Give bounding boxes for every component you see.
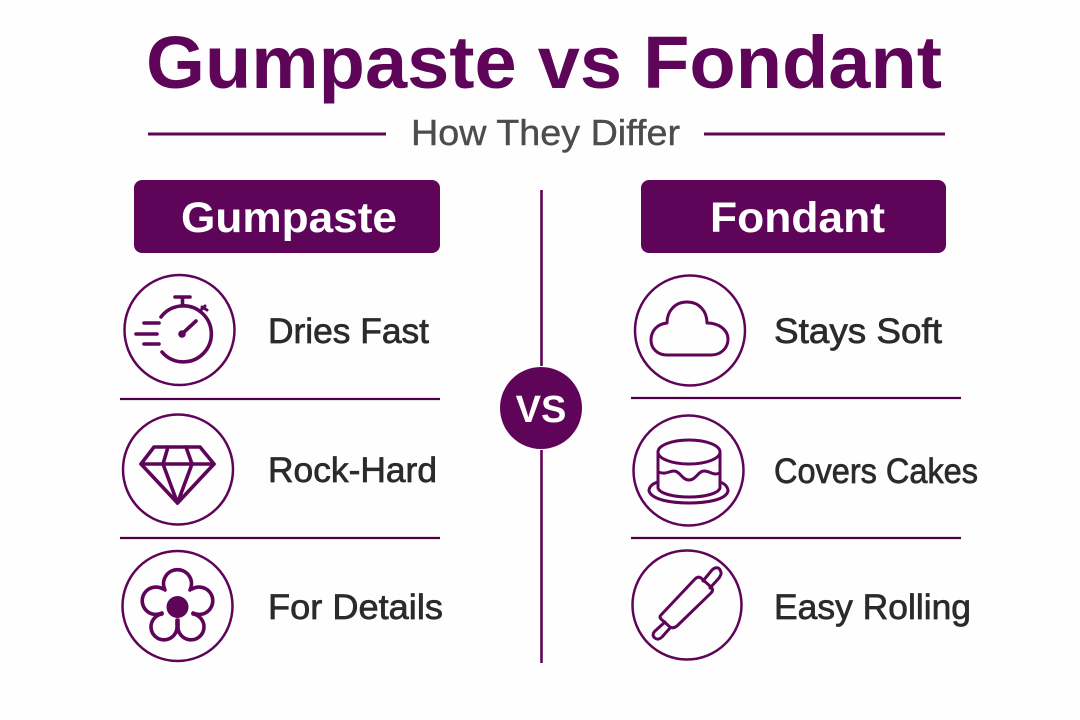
- icon: rolling pin: [632, 550, 742, 660]
- item: rock-hard: [123, 414, 437, 524]
- panel: fondant: [631, 180, 978, 660]
- center divider: [540, 190, 543, 663]
- icon: stopwatch: [124, 275, 234, 385]
- subtitle with side rules: How They Differ: [411, 112, 680, 153]
- label: dries fast: Dries Fast: [268, 312, 429, 351]
- vs badge: [500, 367, 582, 449]
- item: for details: [122, 551, 443, 661]
- icon: cake on plate: [634, 416, 744, 526]
- heading: fondant: [641, 180, 946, 253]
- item: covers cakes: [634, 416, 978, 526]
- item: stays soft: [635, 276, 942, 386]
- label: covers cakes: Covers Cakes: [774, 452, 978, 491]
- heading: gumpaste: [134, 180, 440, 253]
- title: Gumpaste vs Fondant: [146, 21, 942, 104]
- heading: gumpaste: Gumpaste: [181, 194, 397, 242]
- label: stays soft: Stays Soft: [774, 312, 942, 351]
- vs badge: VS: [516, 389, 566, 431]
- panel: gumpaste: [120, 180, 443, 661]
- item: dries fast: [124, 275, 429, 385]
- item: easy rolling: [632, 550, 971, 660]
- icon: diamond: [123, 414, 233, 524]
- label: easy rolling: Easy Rolling: [774, 588, 971, 627]
- heading: fondant: Fondant: [710, 194, 885, 242]
- icon: cloud: [635, 276, 745, 386]
- label: for details: For Details: [268, 588, 443, 627]
- label: rock-hard: Rock-Hard: [268, 451, 437, 490]
- icon: flower: [122, 551, 232, 661]
